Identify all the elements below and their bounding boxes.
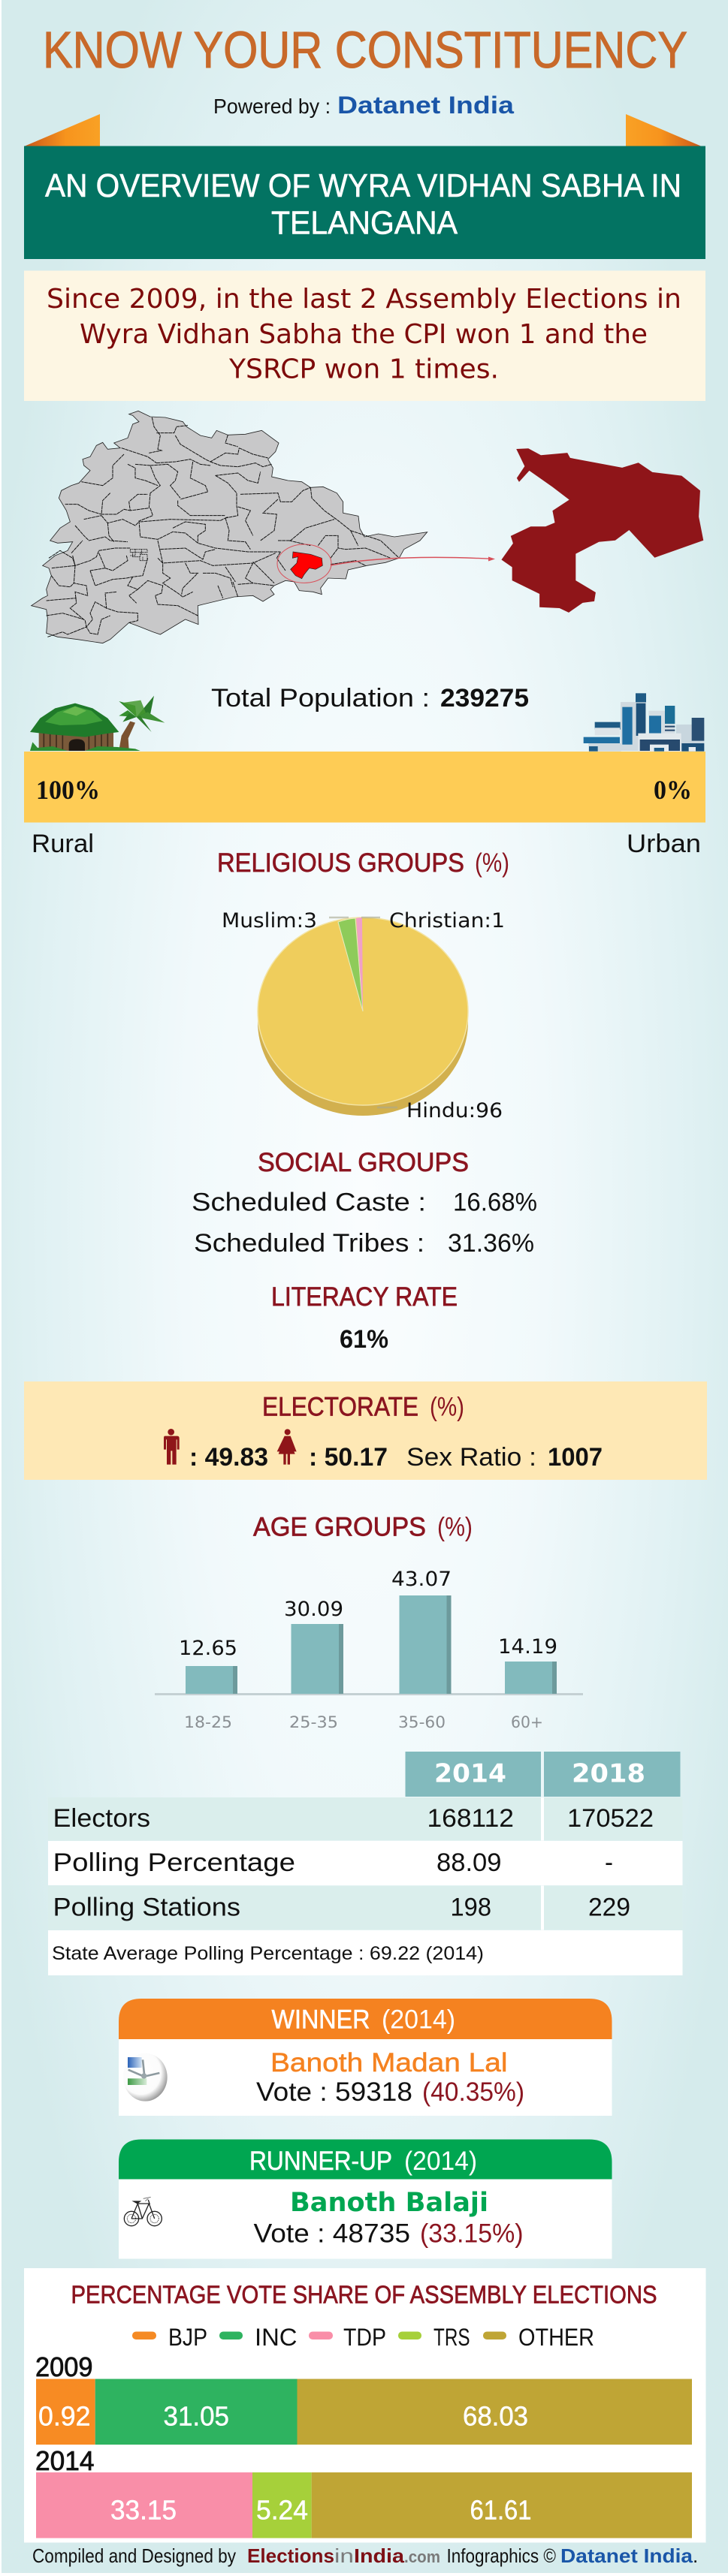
table: electors and polling: Polling Stations	[53, 1894, 240, 1922]
total population	[211, 684, 529, 713]
electorate figures: Sex Ratio :	[406, 1443, 536, 1472]
map: Telangana state with constituency highlighted	[32, 411, 427, 643]
stacked bar: 2014: 5.24	[256, 2494, 308, 2526]
electorate figures: : 50.17	[309, 1443, 388, 1472]
pie labels: Christian:1	[389, 909, 505, 932]
table: electors and polling: 168112	[427, 1804, 514, 1833]
footer credits: Compiled and Designed by	[32, 2544, 236, 2567]
heading: religious groups: (%)	[475, 848, 509, 878]
panel: winner: (40.35%)	[422, 2077, 524, 2107]
legend: INC	[255, 2324, 298, 2351]
heading: age groups: (%)	[437, 1512, 473, 1542]
bar chart: age groups: 43.07	[391, 1568, 452, 1591]
social group figures	[192, 1188, 537, 1258]
heading: social groups: SOCIAL GROUPS	[258, 1148, 469, 1177]
bar chart: age groups: 35-60	[398, 1713, 446, 1731]
panel: electorate	[24, 1381, 707, 1480]
summary callout: Since 2009, in the last 2 Assembly Elections in	[47, 284, 681, 315]
total population: 239275	[440, 684, 529, 713]
footer credits	[32, 2544, 698, 2567]
stacked bar: 2009: 31.05	[164, 2401, 229, 2431]
label: urban: Urban	[627, 830, 701, 858]
panel: runner-up	[119, 2140, 612, 2258]
panel: runner-up: Vote : 48735	[254, 2219, 410, 2248]
arrow	[331, 557, 495, 565]
literacy value: 61%	[340, 1325, 388, 1354]
panel: winner: Vote : 59318	[256, 2077, 412, 2107]
icon: rural hut and palm	[30, 696, 165, 751]
title banner	[24, 146, 705, 259]
table: electors and polling: 2014	[434, 1758, 506, 1788]
rural urban bar	[24, 752, 705, 823]
bar chart: age groups: 30.09	[284, 1598, 343, 1621]
panel: winner: Banoth Madan Lal	[270, 2048, 508, 2077]
table: electors and polling: Polling Percentage	[53, 1848, 295, 1877]
table: electors and polling: Electors	[53, 1804, 150, 1833]
summary callout: YSRCP won 1 times.	[228, 354, 499, 384]
icon: bicycle party symbol	[124, 2197, 162, 2226]
rural urban bar: 100%	[36, 775, 100, 805]
stacked bar: 2009: 2009	[35, 2352, 93, 2382]
bar chart: age groups: 18-25	[184, 1713, 232, 1731]
ribbon fold right	[626, 114, 702, 146]
social group figures: 31.36%	[448, 1229, 534, 1258]
ribbon fold left	[24, 114, 100, 146]
stacked bar: 2014: 33.15	[110, 2494, 177, 2526]
table: electors and polling	[48, 1752, 682, 1975]
stacked bar: 2009: 0.92	[38, 2401, 90, 2431]
electorate heading: (%)	[430, 1392, 464, 1422]
footer credits: Datanet India	[560, 2544, 693, 2567]
table: electors and polling: State Average Polling Percentage : 69.22 (2014)	[52, 1943, 484, 1964]
footer credits: in	[334, 2544, 354, 2567]
panel: winner	[119, 1999, 612, 2116]
pie labels	[222, 909, 505, 1122]
social group figures: 16.68%	[453, 1188, 537, 1216]
stacked bar: 2014: 2014	[35, 2445, 95, 2476]
label: rural: Rural	[32, 830, 94, 858]
icon: ceiling fan party symbol	[123, 2053, 168, 2101]
icon: male	[164, 1429, 180, 1465]
panel: winner: (2014)	[382, 2005, 455, 2035]
rural urban bar: 0%	[654, 775, 692, 805]
legend: TRS	[433, 2324, 470, 2351]
pie labels: Muslim:3	[222, 909, 317, 932]
table: electors and polling: -	[605, 1848, 613, 1877]
table: electors and polling: 88.09	[436, 1848, 502, 1877]
electorate figures: 1007	[548, 1443, 603, 1472]
footer credits: .com	[404, 2547, 440, 2566]
title banner: AN OVERVIEW OF WYRA VIDHAN SABHA IN	[45, 167, 681, 204]
total population: Total Population :	[211, 684, 430, 713]
stacked bar: 2009	[35, 2352, 692, 2445]
highlighted constituency	[291, 552, 322, 579]
table: electors and polling: 2018	[572, 1758, 645, 1788]
panel: winner: WINNER	[272, 2005, 370, 2035]
stacked bar: 2009: 68.03	[463, 2401, 528, 2431]
icon: urban buildings	[584, 693, 704, 752]
electorate figures	[189, 1443, 603, 1472]
constituency shape	[501, 448, 703, 613]
heading: literacy rate: LITERACY RATE	[271, 1282, 458, 1312]
powered by line: Powered by :	[213, 95, 331, 118]
vote share heading: PERCENTAGE VOTE SHARE OF ASSEMBLY ELECTIONS	[71, 2281, 657, 2308]
footer credits: Infographics ©	[446, 2544, 556, 2567]
icon: female	[277, 1429, 297, 1465]
legend: BJP	[168, 2324, 207, 2351]
panel: runner-up: (2014)	[404, 2147, 477, 2176]
electorate heading: ELECTORATE	[262, 1392, 418, 1422]
bar chart: age groups	[155, 1568, 583, 1731]
bar chart: age groups: 25-35	[289, 1713, 338, 1731]
bar chart: age groups: 12.65	[179, 1637, 237, 1660]
legend: TDP	[343, 2324, 386, 2351]
heading: age groups: AGE GROUPS	[253, 1512, 426, 1542]
panel: runner-up: (33.15%)	[420, 2219, 523, 2248]
powered by line: Datanet India	[337, 92, 514, 119]
legend: OTHER	[518, 2324, 594, 2351]
powered by line	[213, 92, 514, 119]
social group figures: Scheduled Tribes :	[194, 1229, 424, 1258]
social group figures: Scheduled Caste :	[192, 1188, 426, 1216]
table: electors and polling: 229	[588, 1894, 630, 1922]
stacked bar: 2014	[35, 2445, 692, 2538]
pie labels: Hindu:96	[406, 1099, 503, 1122]
footer credits: India	[354, 2544, 405, 2567]
panel: vote share	[24, 2268, 706, 2542]
electorate figures: : 49.83	[189, 1443, 268, 1472]
title banner: TELANGANA	[271, 204, 458, 242]
table: electors and polling: 170522	[567, 1804, 654, 1833]
panel: runner-up: RUNNER-UP	[249, 2147, 392, 2176]
heading: religious groups: RELIGIOUS GROUPS	[217, 848, 464, 878]
summary callout: Wyra Vidhan Sabha the CPI won 1 and the	[80, 319, 648, 350]
stacked bar: 2014: 61.61	[470, 2494, 532, 2526]
footer credits: Elections	[247, 2544, 334, 2567]
table: electors and polling: 198	[451, 1894, 491, 1922]
pie chart	[222, 909, 505, 1122]
panel: runner-up: Banoth Balaji	[290, 2188, 488, 2218]
summary callout	[24, 270, 705, 401]
bar chart: age groups: 60+	[511, 1713, 543, 1731]
footer credits: .	[693, 2544, 698, 2567]
legend	[132, 2324, 594, 2351]
bar chart: age groups: 14.19	[498, 1635, 557, 1659]
